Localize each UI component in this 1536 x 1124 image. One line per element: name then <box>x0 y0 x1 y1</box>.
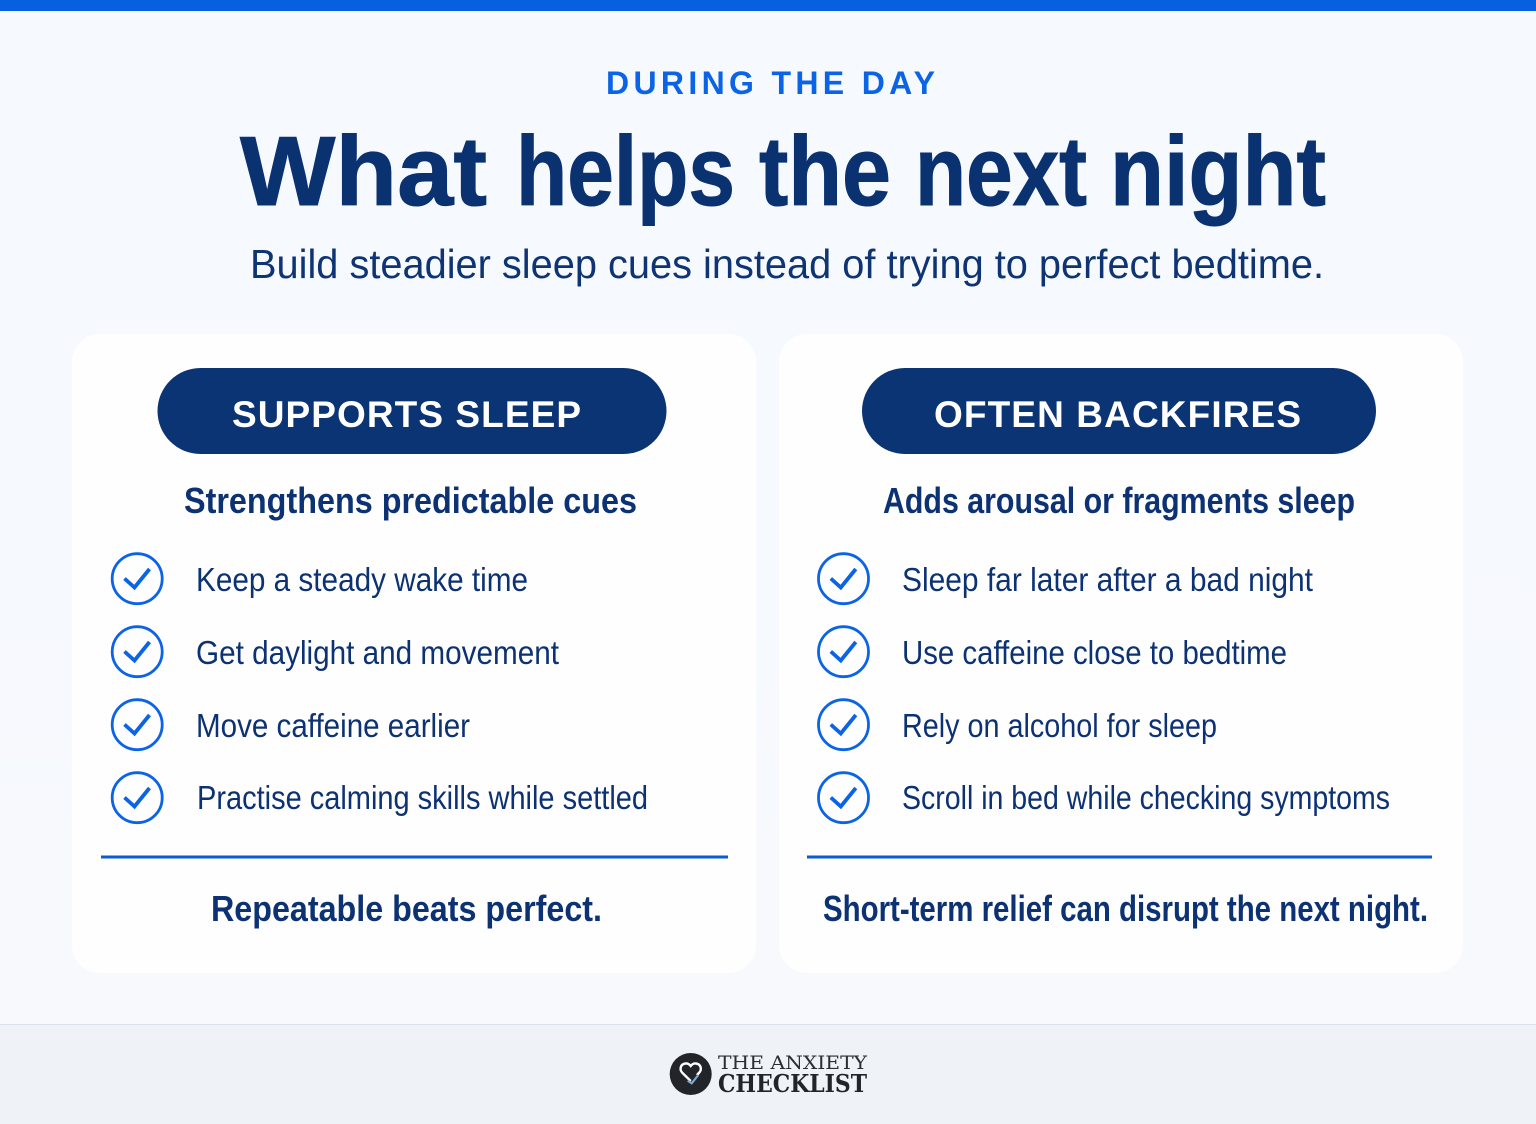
check icon 3 <box>818 700 868 750</box>
item text 4: Scroll in bed while checking symptoms <box>902 779 1390 816</box>
pill heading: often backfires <box>862 368 1376 454</box>
kicker: DURING THE DAY <box>606 65 935 101</box>
panel: often backfires <box>779 334 1463 973</box>
item text 3: Move caffeine earlier <box>196 707 470 744</box>
title: What <box>240 116 487 226</box>
title: night <box>1110 116 1326 226</box>
panel takeaway: repeatable beats perfect: Repeatable beats perfect. <box>211 888 602 929</box>
title: helps <box>516 116 735 226</box>
item text 4: Practise calming skills while settled <box>197 779 648 816</box>
subheading: strengthens predictable cues: Strengthens predictable cues <box>184 480 637 521</box>
check icon 3 <box>112 700 162 750</box>
check icon 1 <box>112 554 162 604</box>
item text 1: Keep a steady wake time <box>196 561 528 598</box>
logo icon: heart with check <box>670 1053 712 1095</box>
subheading: adds arousal: Adds arousal or fragments sleep <box>883 480 1355 521</box>
logo wordmark: THE ANXIETY <box>718 1052 867 1074</box>
top accent bar <box>0 0 1536 11</box>
logo wordmark <box>718 1052 867 1098</box>
panel: supports sleep <box>72 334 756 973</box>
check icon 2 <box>112 627 162 677</box>
check icon 4 <box>112 773 162 823</box>
item text 1: Sleep far later after a bad night <box>902 561 1313 598</box>
item text 3: Rely on alcohol for sleep <box>902 707 1217 744</box>
title: next <box>915 116 1087 226</box>
check icon 4 <box>818 773 868 823</box>
subtitle: Build steadier sleep cues instead of trying to perfect bedtime. <box>250 241 1324 287</box>
check icon 1 <box>818 554 868 604</box>
item text 2: Get daylight and movement <box>196 634 559 671</box>
pill heading: often backfires: OFTEN BACKFIRES <box>934 394 1301 435</box>
pill heading: supports sleep: SUPPORTS SLEEP <box>232 394 581 435</box>
logo wordmark: CHECKLIST <box>718 1069 867 1098</box>
check icon 2 <box>818 627 868 677</box>
item text 2: Use caffeine close to bedtime <box>902 634 1287 671</box>
pill heading: supports sleep <box>158 368 666 454</box>
footer <box>0 1024 1536 1124</box>
title <box>240 116 1326 226</box>
title: the <box>759 116 891 226</box>
